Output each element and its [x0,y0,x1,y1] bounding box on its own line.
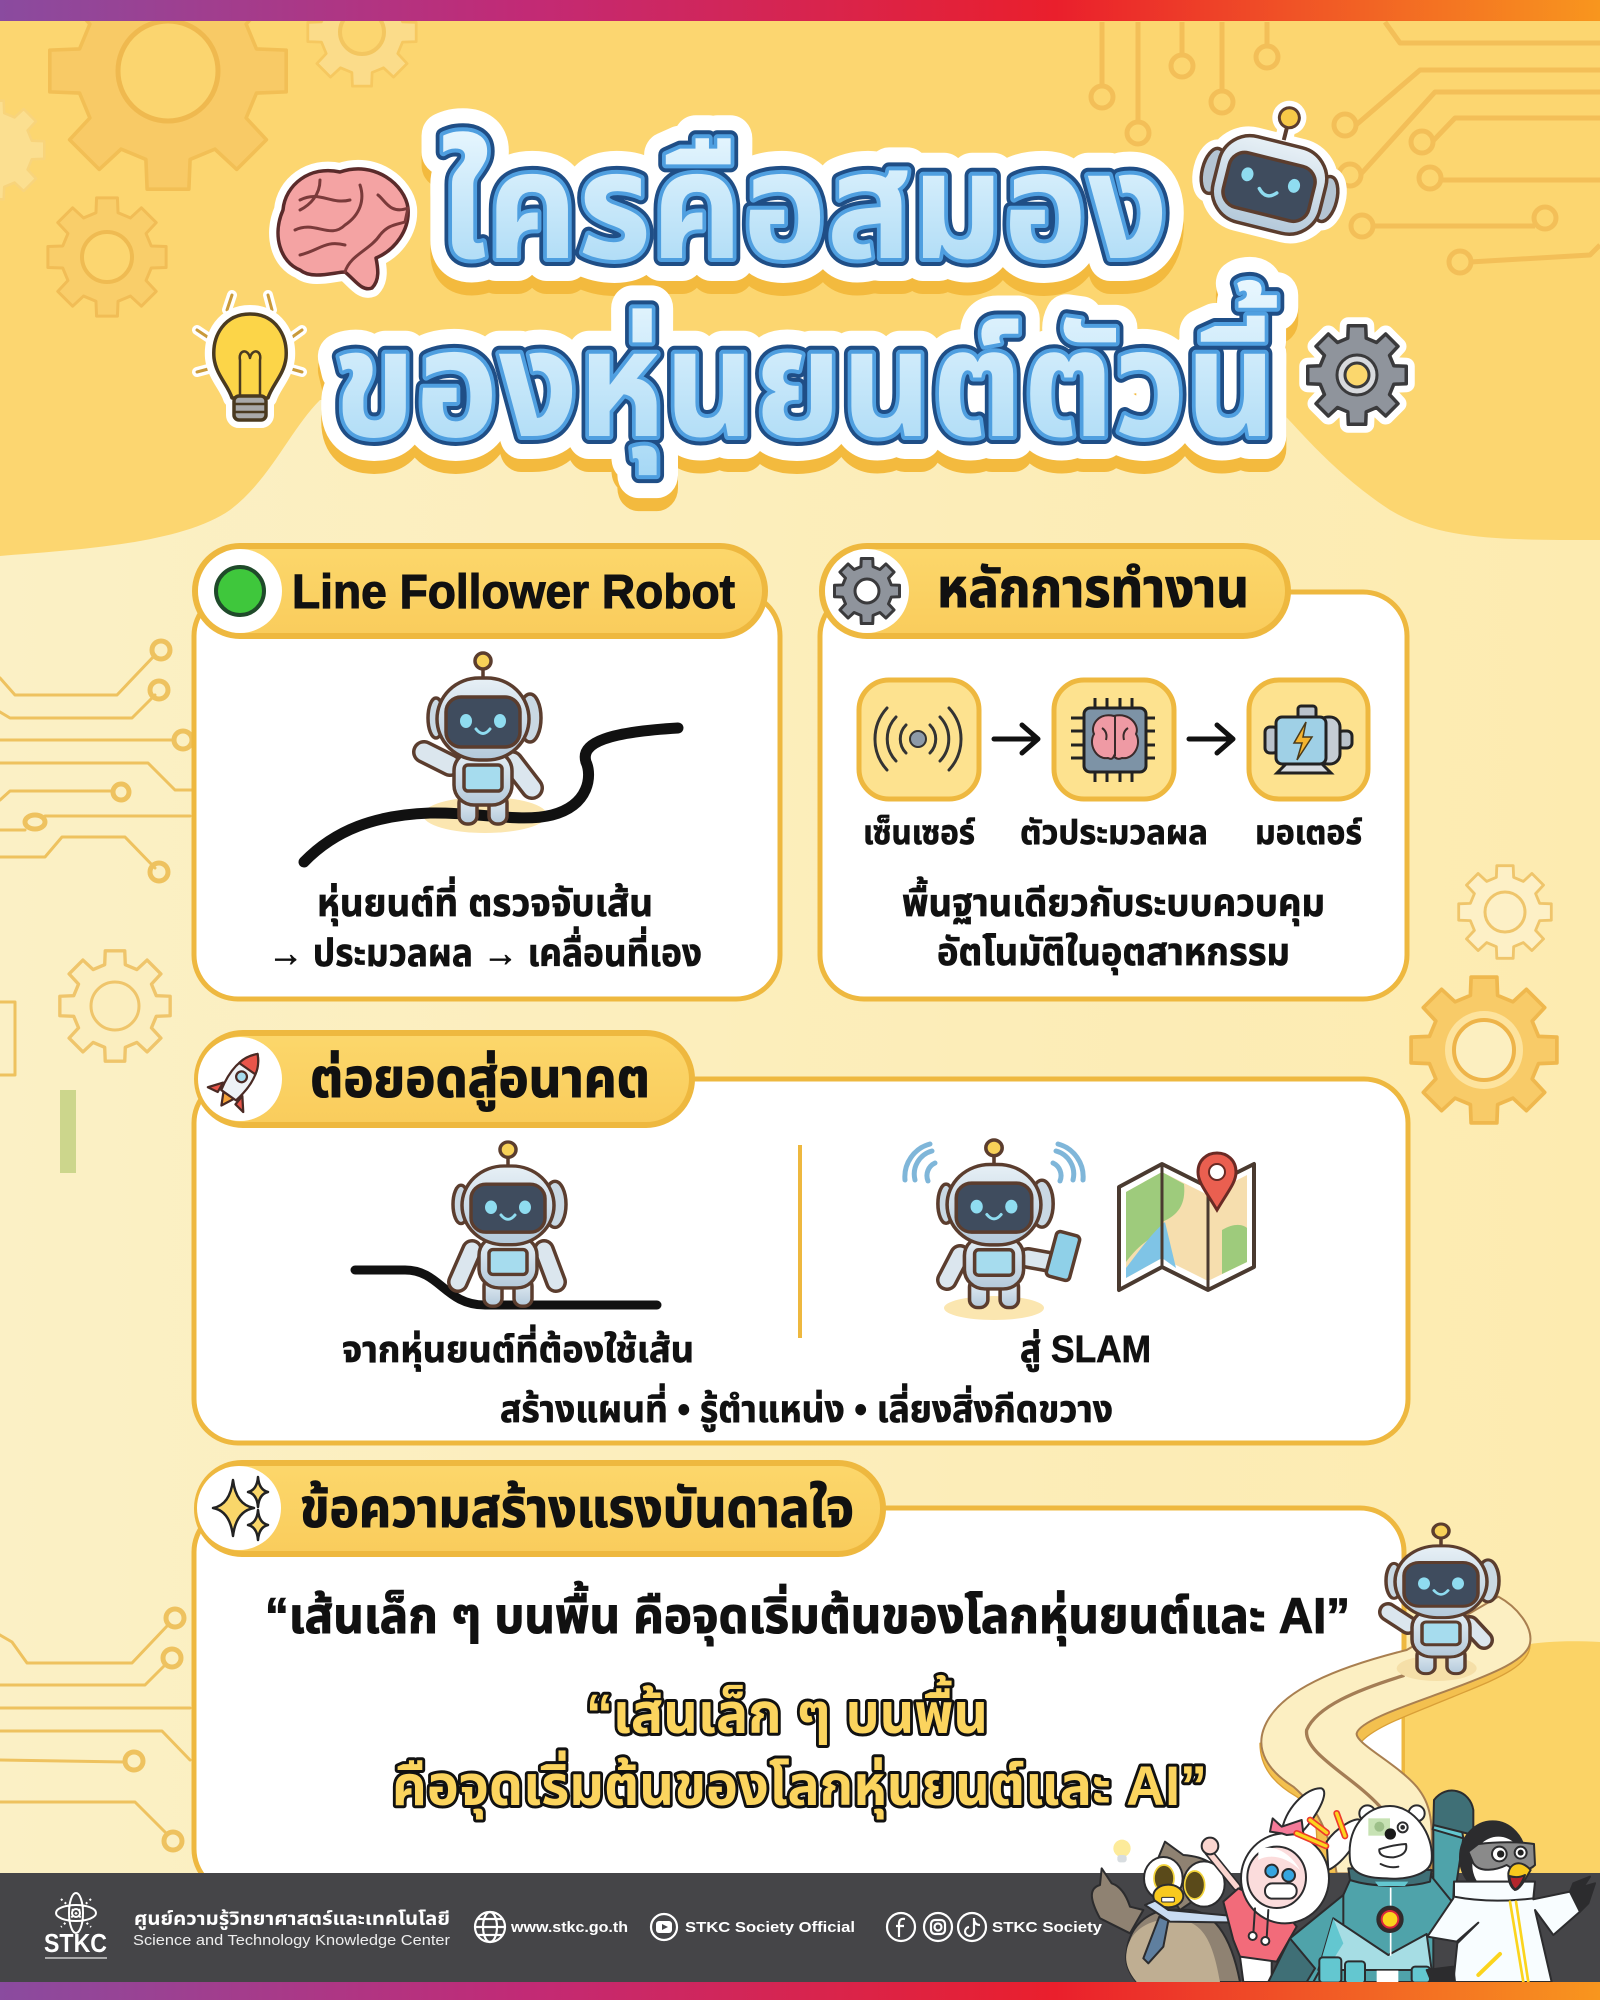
icon: light bulb [197,295,302,420]
line path and robot [304,653,678,862]
process labels: เซ็นเซอร์ [863,814,975,852]
mascot: penguin [1427,1821,1595,1982]
footer organisation name: ศูนย์ความรู้วิทยาศาสตร์และเทคโนโลยี [134,1908,450,1930]
background circuits top right [1091,22,1600,273]
arrow [1189,725,1233,753]
panel: Line Follower Robot [194,546,780,999]
heading pill: principle: หลักการทำงาน [937,559,1249,619]
mascot: owl [1092,1842,1242,1982]
title line 2: ของหุ่นยนต์ตัวนี้ [333,279,1278,475]
mascots [1092,1788,1595,1983]
title line 2: ของหุ่นยนต์ตัวนี้ [333,279,1278,475]
labels: สู่ SLAM [1020,1329,1151,1372]
left: robot on line [355,1142,657,1306]
panel: principle of operation [820,546,1407,999]
arrow [994,725,1038,753]
top gradient bar [0,0,1600,21]
winding road [1260,1597,1530,1873]
heading pill: message [197,1463,883,1554]
mascot: bunny [1202,1788,1360,1982]
title line 2: ของหุ่นยนต์ตัวนี้ [333,279,1278,475]
icon: motor [1249,680,1368,799]
process labels: ตัวประมวลผล [1020,814,1208,852]
footer logo: STKC [44,1928,107,1958]
background gears top left [0,0,416,316]
process labels: มอเตอร์ [1255,814,1362,852]
title line 1: ใครคือสมอง [440,122,1168,290]
heading pill: message: ข้อความสร้างแรงบันดาลใจ [300,1479,854,1539]
footer website: www.stkc.go.th [510,1919,628,1936]
background gears mid [60,866,1557,1123]
icon: sensor [859,680,979,799]
yellow blocks right of message panel [1405,1712,1425,1877]
footer website [475,1912,628,1942]
panel: extending to the future [194,1033,1408,1443]
description text [268,876,702,975]
footer social icons [887,1913,1103,1941]
title line 1: ใครคือสมอง [440,122,1168,290]
highlighted quote: คือจุดเริ่มต้นของโลกหุ่นยนต์และ AI” [392,1749,1207,1820]
description text: พื้นฐานเดียวกับระบบควบคุม [902,876,1325,926]
panel: inspirational message [194,1463,1404,1893]
quote: “เส้นเล็ก ๆ บนพื้น คือจุดเริ่มต้นของโลกหุ่นยนต์และ AI” [265,1581,1350,1646]
heading pill: Line Follower Robot [195,546,765,636]
heading pill: principle [822,546,1288,636]
icon: robot head [1191,87,1358,245]
robot on road [1386,1524,1499,1674]
title line 2: ของหุ่นยนต์ตัวนี้ [333,292,1278,488]
description text: อัตโนมัติในอุตสาหกรรม [937,932,1290,975]
icon: gear [1308,326,1406,424]
icon: brain [278,169,408,289]
labels [342,1324,1151,1432]
footer logo [44,1893,107,1959]
footer organisation name: Science and Technology Knowledge Center [133,1932,450,1949]
glowing bulb [1113,1840,1131,1862]
divider [798,1145,802,1338]
description text [902,876,1325,975]
right: robot with wifi and map [905,1140,1254,1320]
heading pill: future: ต่อยอดสู่อนาคต [310,1049,650,1111]
footer youtube [651,1914,855,1940]
title line 1: ใครคือสมอง [440,135,1168,303]
labels: จากหุ่นยนต์ที่ต้องใช้เส้น [342,1324,694,1371]
mascot: bear [1268,1791,1473,1983]
icon: map [1119,1153,1254,1290]
labels: สร้างแผนที่ • รู้ตำแหน่ง • เลี่ยงสิ่งกีดขวาง [500,1383,1113,1432]
footer social icons: STKC Society [992,1919,1103,1936]
highlighted quote: “เส้นเล็ก ๆ บนพื้น [586,1674,988,1745]
icon: processor [1054,680,1174,799]
title line 1: ใครคือสมอง [440,122,1168,290]
footer bar [0,1873,1600,1982]
title line 2: ของหุ่นยนต์ตัวนี้ [333,279,1278,475]
highlighted quote [392,1674,1207,1820]
background circuits left [0,641,192,1850]
heading pill: future [197,1033,692,1125]
heading pill: Line Follower Robot: Line Follower Robot [292,566,735,619]
process labels [863,814,1362,852]
title line 1: ใครคือสมอง [440,122,1168,290]
description text: หุ่นยนต์ที่ ตรวจจับเส้น [317,876,653,926]
description text: → ประมวลผล → เคลื่อนที่เอง [268,926,702,975]
footer youtube: STKC Society Official [685,1919,855,1936]
footer organisation name [133,1908,450,1949]
title [333,122,1278,488]
bottom gradient bar [0,1982,1600,2000]
